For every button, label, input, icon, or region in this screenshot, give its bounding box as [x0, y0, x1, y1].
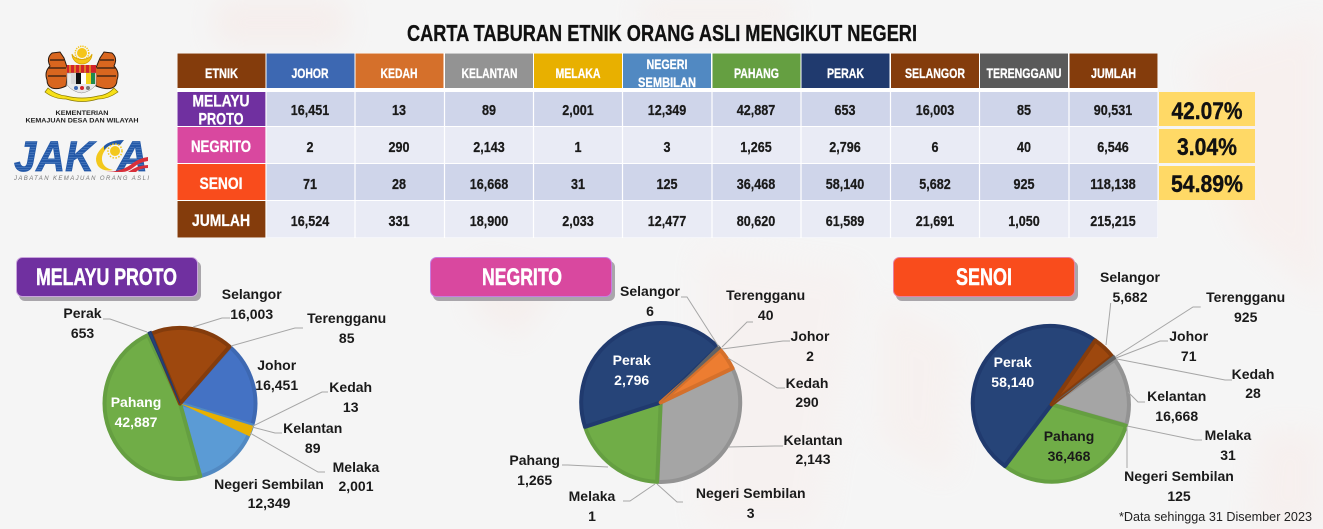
heading badge: Negrito: NEGRITO: [482, 264, 562, 291]
pie labels: Senoi: 28: [1245, 385, 1261, 401]
pie labels: Melayu Proto: 653: [71, 325, 94, 341]
pie labels: Senoi: 71: [1181, 348, 1197, 364]
table row: Melayu Proto: 89: [482, 102, 496, 119]
table row: Jumlah: 1,050: [1008, 213, 1040, 230]
table row: Senoi: 118,138: [1090, 176, 1136, 193]
table row: Senoi: SENOI: [200, 175, 242, 193]
pie labels: Negrito: Kelantan: [783, 432, 843, 448]
table header row: KELANTAN: [462, 66, 518, 81]
table row: Negrito: [178, 127, 1158, 163]
table header row: MELAKA: [556, 66, 601, 81]
table row: Negrito: 6,546: [1097, 139, 1129, 156]
pie labels: Negrito: 2,796: [614, 372, 649, 388]
table row: Negrito: 2,796: [829, 139, 861, 156]
pie labels: Melayu Proto: 2,001: [338, 478, 374, 494]
table header row: TERENGGANU: [986, 66, 1062, 81]
table header row: [178, 54, 1158, 90]
heading badge: Senoi: SENOI: [956, 264, 1012, 291]
pie labels: Melayu Proto: Negeri Sembilan: [214, 476, 324, 492]
table row: Negrito: 40: [1017, 139, 1031, 156]
pie labels: Melayu Proto: 13: [343, 399, 359, 415]
table header row: JOHOR: [292, 66, 329, 81]
table row: Senoi: 36,468: [737, 176, 775, 193]
table row: Senoi: 31: [571, 176, 585, 193]
pie labels: Negrito: 2,143: [795, 451, 831, 467]
percentage: Senoi: [1159, 166, 1255, 200]
logo text: ministry name: KEMAJUAN DESA DAN WILAYAH: [26, 118, 139, 124]
table row: Melayu Proto: PROTO: [198, 110, 244, 128]
table row: Senoi: 125: [656, 176, 678, 193]
pie labels: Melayu Proto: Melaka: [333, 459, 380, 475]
percentage: Negrito: [1159, 129, 1255, 163]
pie labels: Negrito: Perak: [613, 352, 651, 368]
pie labels: Negrito: Selangor: [620, 283, 681, 299]
table row: Jumlah: 21,691: [916, 213, 954, 230]
table row: Negrito: 2,143: [473, 139, 505, 156]
table row: Senoi: 71: [303, 176, 317, 193]
table row: Melayu Proto: 2,001: [562, 102, 594, 119]
table row: Melayu Proto: 653: [834, 102, 856, 119]
pie labels: Negrito: Terengganu: [726, 287, 805, 303]
table row: Jumlah: 18,900: [470, 213, 508, 230]
pie labels: Negrito: 2: [806, 348, 814, 364]
pie labels: Negrito: Melaka: [569, 488, 616, 504]
pie labels: Melayu Proto: 42,887: [115, 414, 158, 430]
table header row: SEMBILAN: [638, 75, 696, 90]
table row: Negrito: 290: [388, 139, 410, 156]
table row: Melayu Proto: 85: [1017, 102, 1031, 119]
pie labels: Senoi: 16,668: [1155, 408, 1198, 424]
table row: Negrito: NEGRITO: [191, 138, 251, 156]
pie labels: Negrito: Negeri Sembilan: [696, 485, 806, 501]
pie labels: Senoi: 31: [1220, 447, 1236, 463]
pie labels: Melayu Proto: Pahang: [111, 394, 161, 410]
logo: JAKOA: A: [116, 133, 148, 181]
percentage: Melayu Proto: [1159, 92, 1255, 126]
pie labels: Negrito: [509, 283, 843, 524]
pie labels: Melayu Proto: [63, 286, 386, 511]
pie labels: Melayu Proto: 16,451: [255, 377, 298, 393]
pie labels: Senoi: Negeri Sembilan: [1124, 468, 1234, 484]
table row: Senoi: 5,682: [919, 176, 951, 193]
pie labels: Melayu Proto: 85: [339, 330, 355, 346]
pie labels: Negrito: 6: [646, 303, 654, 319]
table row: Jumlah: JUMLAH: [192, 212, 250, 230]
pie labels: Senoi: Johor: [1169, 328, 1209, 344]
table row: Jumlah: [178, 201, 1158, 238]
table row: Senoi: [178, 164, 1158, 200]
table header row: JUMLAH: [1091, 66, 1136, 81]
table row: Jumlah: 331: [388, 213, 410, 230]
pie labels: Senoi: Kedah: [1232, 366, 1274, 382]
table row: Senoi: 58,140: [826, 176, 864, 193]
pie labels: Senoi: 5,682: [1112, 289, 1148, 305]
heading badge: Negrito: [430, 258, 615, 301]
pie labels: Senoi: 125: [1167, 488, 1191, 504]
pie labels: Negrito: Pahang: [509, 452, 560, 468]
table row: Melayu Proto: 13: [392, 102, 406, 119]
pie labels: Senoi: 58,140: [991, 374, 1034, 390]
table row: Negrito: 2: [306, 139, 314, 156]
table row: Jumlah: 2,033: [562, 213, 594, 230]
table row: Senoi: 16,668: [470, 176, 508, 193]
logo: JAKOA: JAK: [14, 133, 97, 181]
heading badge: Melayu Proto: MELAYU PROTO: [36, 264, 177, 291]
pie labels: Negrito: Johor: [791, 328, 830, 344]
table row: Senoi: 925: [1014, 176, 1034, 193]
logo text: ministry name: KEMENTERIAN: [56, 110, 109, 117]
pie labels: Senoi: Kelantan: [1147, 388, 1206, 404]
footnote: *Data sehingga 31 Disember 2023: [1119, 510, 1312, 524]
pie labels: Negrito: 3: [747, 505, 755, 521]
pie labels: Senoi: 36,468: [1048, 448, 1091, 464]
logo: JAKOA: [13, 133, 149, 182]
title: CARTA TABURAN ETNIK ORANG ASLI MENGIKUT NEGERI: [407, 20, 917, 46]
table: ethnic distribution: [177, 53, 1158, 238]
table row: Negrito: 3: [664, 139, 670, 156]
table row: Melayu Proto: 12,349: [648, 102, 686, 119]
pie labels: Melayu Proto: Selangor: [222, 286, 282, 302]
table row: Melayu Proto: 42,887: [737, 102, 775, 119]
table header row: NEGERI: [646, 57, 688, 72]
pie labels: Senoi: Melaka: [1205, 427, 1252, 443]
table row: Jumlah: 12,477: [648, 213, 686, 230]
table row: Jumlah: 16,524: [291, 213, 330, 230]
logo text: ministry name: [26, 110, 139, 124]
table row: Jumlah: 215,215: [1090, 213, 1136, 230]
pie labels: Senoi: Pahang: [1044, 428, 1094, 444]
percentage: Melayu Proto: 42.07%: [1172, 98, 1243, 125]
table header row: ETNIK: [205, 66, 238, 81]
table row: Jumlah: 61,589: [826, 213, 864, 230]
pie labels: Senoi: Perak: [994, 354, 1032, 370]
table header row: KEDAH: [380, 66, 418, 81]
pie chart: Melayu Proto: [105, 328, 255, 479]
table header row: PERAK: [827, 66, 864, 81]
pie labels: Negrito: 1: [588, 508, 596, 524]
table header row: PAHANG: [734, 66, 779, 81]
logo: ministry coat of arms: [45, 46, 118, 102]
pie labels: Melayu Proto: Kelantan: [283, 420, 342, 436]
pie chart: Senoi: [973, 326, 1129, 482]
table row: Melayu Proto: 90,531: [1094, 102, 1132, 119]
pie labels: Melayu Proto: Terengganu: [307, 310, 386, 326]
table row: Melayu Proto: [178, 92, 1158, 128]
table row: Senoi: 28: [392, 176, 406, 193]
table row: Negrito: 1: [574, 139, 582, 156]
pie labels: Senoi: Terengganu: [1206, 289, 1285, 305]
pie labels: Senoi: Selangor: [1100, 269, 1161, 285]
pie labels: Negrito: 290: [795, 394, 819, 410]
table header row: SELANGOR: [905, 66, 965, 81]
pie labels: Senoi: [991, 269, 1285, 504]
table row: Jumlah: 80,620: [737, 213, 775, 230]
pie labels: Melayu Proto: 89: [305, 440, 321, 456]
table row: Melayu Proto: 16,003: [916, 102, 954, 119]
pie chart: Negrito: [581, 323, 740, 482]
table row: Melayu Proto: 16,451: [291, 102, 329, 119]
pie labels: Melayu Proto: Kedah: [329, 379, 372, 395]
pie labels: Melayu Proto: 16,003: [230, 306, 273, 322]
pie labels: Negrito: 40: [758, 307, 774, 323]
table row: Negrito: 6: [932, 139, 938, 156]
pie labels: Senoi: 925: [1234, 309, 1258, 325]
percentage: Negrito: 3.04%: [1177, 134, 1237, 161]
percentage: Senoi: 54.89%: [1171, 171, 1243, 198]
pie labels: Melayu Proto: 12,349: [248, 495, 291, 511]
pie labels: Negrito: Kedah: [786, 375, 828, 391]
pie labels: Negrito: 1,265: [517, 472, 552, 488]
pie labels: Melayu Proto: Perak: [63, 305, 102, 321]
heading badge: Melayu Proto: [16, 258, 201, 301]
heading badge: Senoi: [894, 258, 1078, 301]
pie labels: Melayu Proto: Johor: [257, 357, 297, 373]
table row: Melayu Proto: MELAYU: [192, 92, 250, 110]
logo: JAKOA: JABATAN KEMAJUAN ORANG ASLI: [13, 176, 149, 182]
table row: Negrito: 1,265: [740, 139, 772, 156]
